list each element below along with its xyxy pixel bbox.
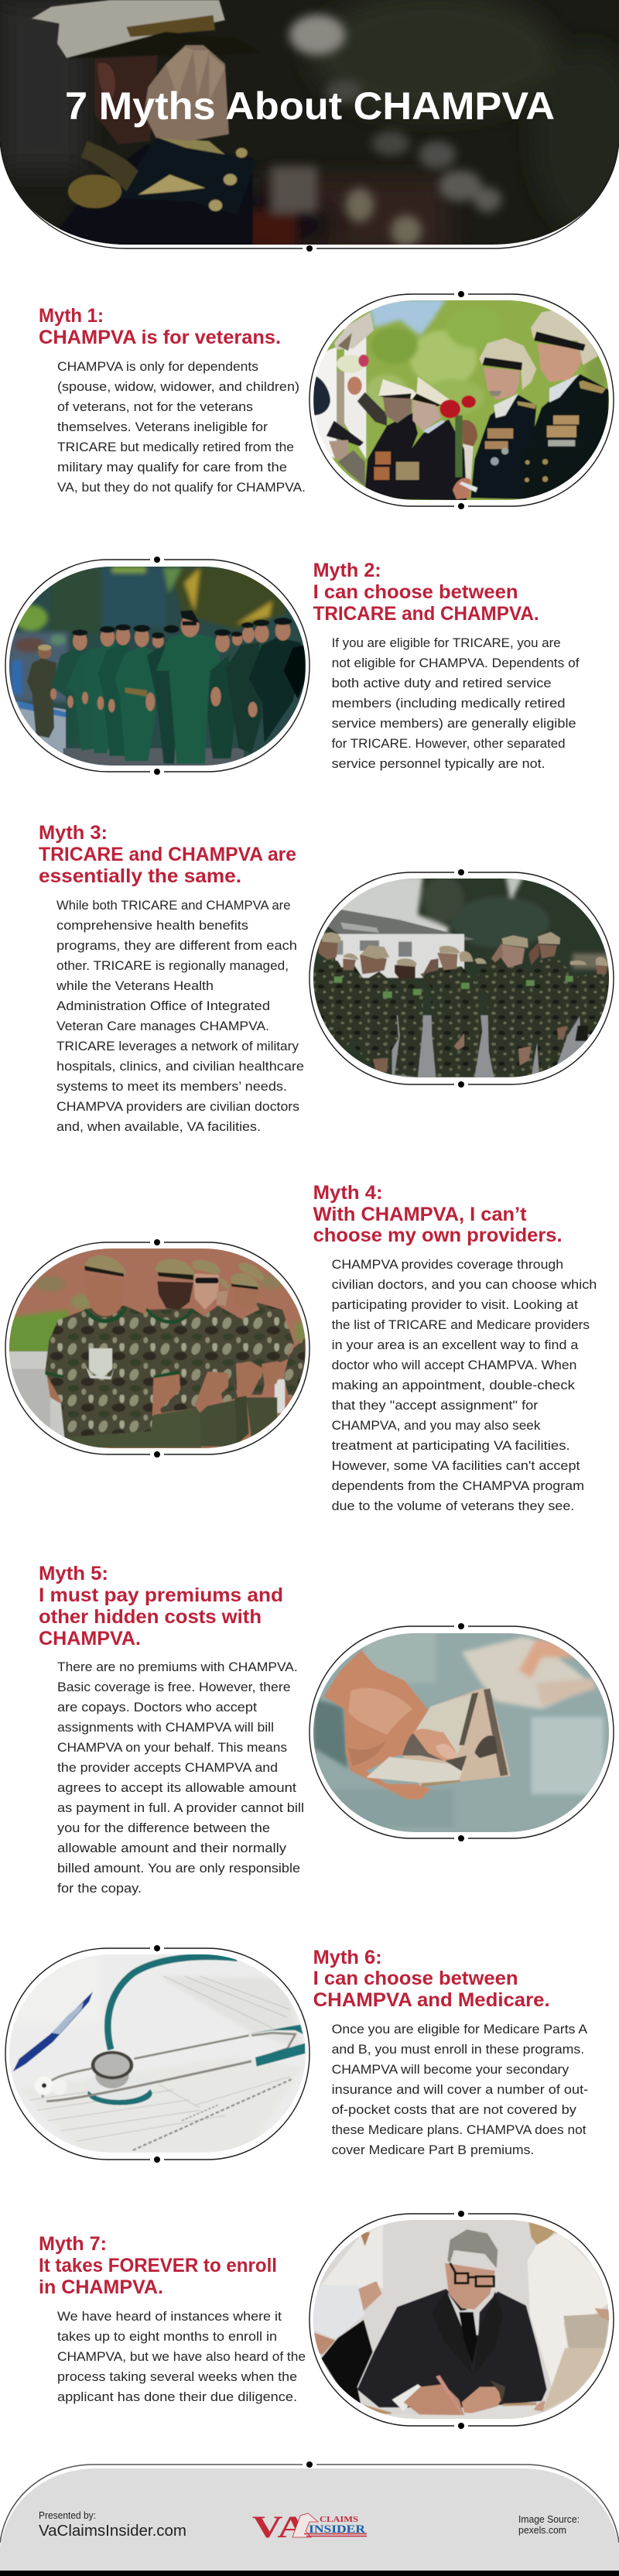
presented by: VaClaimsInsider.com [39, 2523, 186, 2540]
photo: saluting officer in dress uniform [0, 0, 619, 255]
text block: myth 7 body: We have heard of instances where it [57, 2310, 282, 2324]
frame dots [154, 557, 160, 775]
photo frame [5, 1242, 310, 1454]
text block: myth 3 body: comprehensive health benefits [56, 919, 248, 933]
heading: myth 6: CHAMPVA and Medicare. [313, 1989, 550, 2011]
heading: myth 5: CHAMPVA. [39, 1628, 141, 1649]
footer dot [306, 2461, 313, 2468]
heading: myth 3: essentially the same. [39, 865, 241, 887]
text block: myth 4 body: However, some VA facilities can't accept [332, 1459, 580, 1473]
photo: marching service members [6, 564, 308, 768]
frame dots [154, 1239, 160, 1458]
text block: myth 7 body: applicant has done their due diligence. [57, 2390, 297, 2404]
text block: myth 1 body: CHAMPVA is only for dependents [57, 360, 258, 374]
photo: saluting soldiers in camouflage [312, 876, 614, 1082]
text block: myth 3 body: systems to meet its members’ needs. [56, 1080, 287, 1094]
title: 7 Myths About CHAMPVA [65, 84, 555, 128]
text block: myth 3 body: Administration Office of Integrated [56, 999, 270, 1013]
text block: myth 5 body [57, 1660, 304, 1896]
text block: myth 5 body: assignments with CHAMPVA will bill [57, 1721, 274, 1735]
logo: VA Claims Insider: INSIDER [309, 2523, 365, 2536]
frame dots [458, 1623, 464, 1841]
text block: myth 4 body: CHAMPVA provides coverage through [332, 1258, 563, 1272]
text block: myth 1 body: of veterans, not for the veterans [57, 400, 253, 414]
image source [518, 2513, 580, 2536]
heading: myth 5: Myth 5: [39, 1563, 108, 1584]
text block: myth 1 body: themselves. Veterans ineligible for [57, 420, 268, 434]
text block: myth 2 body: for TRICARE. However, other separated [332, 737, 566, 751]
image source: pexels.com [518, 2524, 566, 2536]
heading: myth 2: I can choose between [313, 581, 518, 603]
text block: myth 5 body: the provider accepts CHAMPVA and [57, 1761, 278, 1775]
heading: myth 2 [313, 560, 539, 625]
text block: myth 4 body: CHAMPVA, and you may also seek [332, 1419, 541, 1433]
photo frame [310, 872, 614, 1084]
logo: VA Claims Insider: CLAIMS [320, 2516, 358, 2524]
panel: myth 5 [39, 1563, 614, 1896]
heading: myth 6: Myth 6: [313, 1947, 382, 1968]
text block: myth 3 body: hospitals, clinics, and civilian healthcare [56, 1060, 304, 1074]
photo: older soldiers in camouflage shirts [6, 1246, 308, 1451]
bottom black bar [0, 2571, 619, 2576]
heading: myth 7: in CHAMPVA. [39, 2276, 163, 2298]
text block: myth 3 body: programs, they are different from each [56, 939, 297, 953]
photo: executive signing document [312, 2217, 614, 2423]
heading: myth 3 [39, 822, 296, 887]
heading: myth 2: Myth 2: [313, 560, 381, 581]
footer grey background [0, 2468, 619, 2571]
text block: myth 3 body: and, when available, VA facilities. [56, 1120, 261, 1134]
text block: myth 5 body: for the copay. [57, 1882, 142, 1896]
panel: myth 6 [5, 1945, 588, 2163]
frame dots [154, 1945, 160, 2163]
text block: myth 4 body: due to the volume of veterans they see. [332, 1499, 574, 1513]
text block: myth 7 body: process taking several weeks when the [57, 2370, 297, 2384]
text block: myth 2 body: members (including medically retired [332, 697, 566, 711]
text block: myth 3 body: CHAMPVA providers are civilian doctors [56, 1100, 299, 1114]
frame dots [458, 2211, 464, 2429]
photo: stethoscope on medical form [6, 1951, 308, 2156]
text block: myth 4 body: treatment at participating VA facilities. [332, 1439, 570, 1453]
text block: myth 6 body: cover Medicare Part B premiums. [332, 2143, 534, 2157]
text block: myth 5 body: There are no premiums with CHAMPVA. [57, 1660, 298, 1674]
photo frame [310, 294, 614, 506]
text block: myth 2 body: service personnel typically are not. [332, 757, 545, 771]
text block: myth 2 body: If you are eligible for TRICARE, you are [332, 636, 561, 650]
text block: myth 4 body: that they "accept assignment" for [332, 1399, 539, 1413]
panel: myth 7 [39, 2211, 614, 2429]
text block: myth 5 body: are copays. Doctors who accept [57, 1701, 257, 1714]
footer outline [0, 2465, 619, 2543]
text block: myth 4 body: civilian doctors, and you can choose which [332, 1278, 597, 1292]
logo: VA Claims Insider: VA [252, 2509, 308, 2544]
text block: myth 5 body: Basic coverage is free. However, there [57, 1680, 291, 1694]
text block: myth 1 body: TRICARE but medically retired from the [57, 440, 294, 454]
heading: myth 6: I can choose between [313, 1968, 518, 1989]
panel: myth 2 [5, 557, 580, 775]
logo: VA Claims Insider [252, 2509, 367, 2544]
photo: hands holding dollar bills [312, 1630, 614, 1834]
text block: myth 5 body: agrees to accept its allowable amount [57, 1781, 296, 1795]
heading: myth 4 [313, 1182, 563, 1246]
text block: myth 4 body [332, 1258, 597, 1513]
text block: myth 4 body: participating provider to visit. Looking at [332, 1298, 578, 1312]
text block: myth 5 body: billed amount. You are only responsible [57, 1862, 300, 1875]
text block: myth 4 body: doctor who will accept CHAMPVA. When [332, 1358, 576, 1372]
header outline [0, 141, 619, 248]
text block: myth 2 body: both active duty and retired service [332, 677, 552, 690]
heading: myth 1: CHAMPVA is for veterans. [39, 327, 281, 348]
heading: myth 3: Myth 3: [39, 822, 108, 844]
text block: myth 3 body: Veteran Care manages CHAMPVA. [56, 1019, 269, 1033]
text block: myth 5 body: CHAMPVA on your behalf. This means [57, 1741, 287, 1755]
header dot [306, 245, 313, 252]
text block: myth 3 body [56, 899, 304, 1134]
text block: myth 2 body [332, 636, 580, 771]
heading: myth 4: Myth 4: [313, 1182, 383, 1204]
photo: veterans with medals [312, 298, 614, 505]
panel: myth 4 [5, 1182, 597, 1513]
heading: myth 6 [313, 1947, 550, 2011]
text block: myth 6 body: insurance and will cover a number of out- [332, 2083, 588, 2097]
heading: myth 7 [39, 2233, 277, 2298]
text block: myth 5 body: allowable amount and their normally [57, 1841, 287, 1855]
text block: myth 3 body: While both TRICARE and CHAMPVA are [56, 899, 291, 913]
heading: myth 2: TRICARE and CHAMPVA. [313, 603, 539, 625]
text block: myth 3 body: TRICARE leverages a network of military [56, 1040, 299, 1053]
text block: myth 4 body: dependents from the CHAMPVA program [332, 1479, 584, 1493]
photo frame [310, 1626, 614, 1838]
panel: myth 1 [39, 291, 614, 509]
text block: myth 6 body: Once you are eligible for Medicare Parts A [332, 2023, 587, 2036]
text block: myth 1 body: (spouse, widow, widower, and children) [57, 380, 299, 394]
text block: myth 1 body [57, 360, 306, 495]
text block: myth 5 body: you for the difference between the [57, 1821, 270, 1835]
heading: myth 4: With CHAMPVA, I can’t [313, 1204, 527, 1225]
panel: myth 3 [39, 822, 614, 1134]
text block: myth 4 body: the list of TRICARE and Medicare providers [332, 1318, 590, 1332]
presented by: Presented by: [39, 2509, 96, 2521]
panel: footer [0, 2461, 619, 2576]
text block: myth 1 body: VA, but they do not qualify for CHAMPVA. [57, 481, 306, 495]
text block: myth 6 body: these Medicare plans. CHAMPVA does not [332, 2123, 587, 2137]
photo frame [310, 2214, 614, 2426]
heading: myth 7: Myth 7: [39, 2233, 107, 2255]
text block: myth 6 body: and B, you must enroll in these programs. [332, 2043, 584, 2057]
text block: myth 2 body: service members) are generally eligible [332, 717, 576, 731]
image source: Image Source: [518, 2513, 580, 2525]
photo frame [5, 1948, 310, 2160]
presented by [39, 2509, 186, 2540]
heading: myth 5 [39, 1563, 283, 1649]
frame dots [458, 291, 464, 509]
text block: myth 3 body: other. TRICARE is regionally managed, [56, 959, 289, 973]
text block: myth 2 body: not eligible for CHAMPVA. Dependents of [332, 656, 580, 670]
heading: myth 1: Myth 1: [39, 305, 104, 327]
text block: myth 3 body: while the Veterans Health [56, 979, 214, 993]
text block: myth 5 body: as payment in full. A provider cannot bill [57, 1801, 304, 1815]
text block: myth 7 body [57, 2310, 306, 2404]
photo frame [5, 560, 310, 772]
text block: myth 1 body: military may qualify for care from the [57, 461, 287, 474]
heading: myth 5: other hidden costs with [39, 1606, 262, 1628]
text block: myth 4 body: in your area is an excellent way to find a [332, 1338, 579, 1352]
text block: myth 6 body: of-pocket costs that are not covered by [332, 2103, 577, 2117]
text block: myth 6 body: CHAMPVA will become your secondary [332, 2063, 569, 2077]
heading: myth 1 [39, 305, 281, 348]
heading: myth 7: It takes FOREVER to enroll [39, 2255, 277, 2276]
heading: myth 5: I must pay premiums and [39, 1584, 283, 1606]
heading: myth 4: choose my own providers. [313, 1225, 563, 1246]
text block: myth 6 body [332, 2023, 588, 2157]
panel: header banner [0, 0, 619, 255]
text block: myth 7 body: CHAMPVA, but we have also heard of the [57, 2350, 306, 2364]
frame dots [458, 869, 464, 1088]
text block: myth 4 body: making an appointment, double-check [332, 1379, 576, 1392]
heading: myth 3: TRICARE and CHAMPVA are [39, 844, 296, 865]
text block: myth 7 body: takes up to eight months to enroll in [57, 2330, 277, 2344]
